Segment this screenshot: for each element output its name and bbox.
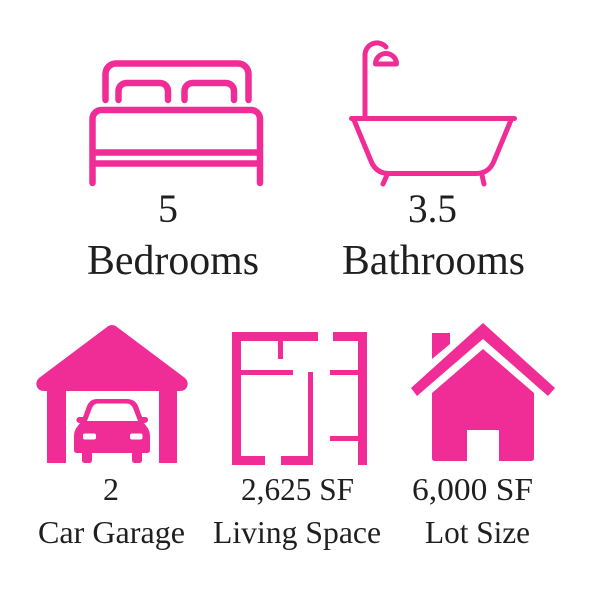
stat: bedrooms	[87, 186, 259, 284]
stat: bathrooms: Bathrooms	[342, 238, 525, 284]
stat: bathrooms	[342, 186, 525, 284]
icon: bed	[92, 64, 260, 183]
stat: car garage: Car Garage	[38, 514, 185, 550]
icon: floor plan	[232, 332, 367, 465]
stat: lot size: 6,000 SF	[412, 471, 533, 507]
stat: car garage	[38, 471, 185, 550]
stat: bathrooms: 3.5	[408, 186, 457, 231]
stat: car garage: 2	[103, 471, 119, 507]
icon: bathtub	[352, 43, 514, 184]
stat: lot size	[412, 471, 533, 550]
stat: living space: Living Space	[213, 514, 381, 550]
icon: house	[411, 323, 555, 461]
stat: lot size: Lot Size	[425, 514, 530, 550]
stat: living space: 2,625 SF	[241, 471, 354, 507]
stat: bedrooms: 5	[158, 186, 178, 231]
stat: bedrooms: Bedrooms	[87, 238, 259, 284]
stat: living space	[213, 471, 381, 550]
icon: car garage	[36, 325, 188, 463]
